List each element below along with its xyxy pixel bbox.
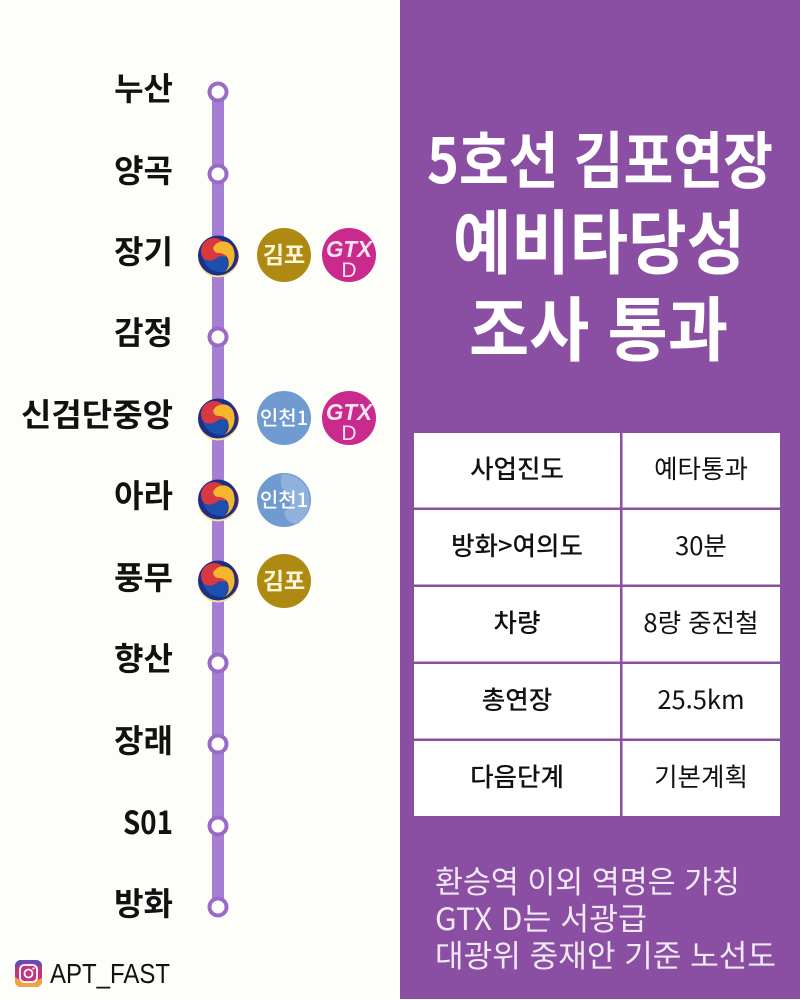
station: 장래: 장래 <box>114 716 173 762</box>
badge: 인천1 at 신검단중앙: 인천1 <box>260 402 308 431</box>
station names <box>21 64 173 925</box>
icon: emblem at 장기 <box>198 236 239 278</box>
badge: 인천1 at 아라: 인천1 <box>260 484 308 513</box>
station: 누산: 누산 <box>114 64 173 110</box>
station: 아라: 아라 <box>114 471 173 517</box>
badge: 인천1 at 아라 <box>257 473 311 527</box>
handle text: APT_FAST <box>50 958 170 989</box>
station: S01: S01 <box>123 798 173 844</box>
station: 장기: 장기 <box>114 227 173 273</box>
instagram credit <box>15 958 170 989</box>
row: 사업진도 <box>470 449 748 486</box>
row: 방화>여의도 <box>451 526 727 563</box>
station: 풍무: 풍무 <box>114 553 173 599</box>
title: 예비타당성 <box>453 188 745 289</box>
icon: emblem at 아라 <box>198 480 239 522</box>
icon: emblem at 풍무 <box>198 560 239 602</box>
icon: instagram <box>15 960 42 987</box>
station: 신검단중앙: 신검단중앙 <box>21 390 173 436</box>
station marker: 양곡 <box>210 166 226 182</box>
row: 차량: 차량 <box>494 603 540 640</box>
row: 사업진도: 사업진도 <box>470 449 564 486</box>
subway line <box>210 84 226 916</box>
row: 다음단계: 기본계획 <box>654 757 748 794</box>
badge: 김포 at 장기 <box>257 228 311 282</box>
station: 감정: 감정 <box>114 308 173 354</box>
station: 방화: 방화 <box>114 879 173 925</box>
badge: 김포 at 풍무: 김포 <box>263 562 305 596</box>
station marker: 장래 <box>210 736 226 752</box>
station marker: 누산 <box>210 84 226 100</box>
row: 다음단계: 다음단계 <box>470 757 564 794</box>
badge: 김포 at 풍무 <box>257 554 311 608</box>
footnote: GTX D는 서광급 <box>435 894 647 939</box>
station: 향산: 향산 <box>114 634 173 680</box>
footnote: 환승역 이외 역명은 가칭 <box>435 857 740 902</box>
station marker: S01 <box>210 818 226 834</box>
station: 양곡: 양곡 <box>114 146 173 192</box>
title: 조사 통과 <box>469 275 728 376</box>
station marker: 감정 <box>210 328 226 346</box>
row: 총연장: 총연장 <box>482 680 552 717</box>
badge: 인천1 at 신검단중앙 <box>257 391 311 445</box>
row: 사업진도: 예타통과 <box>654 449 748 486</box>
badge: 김포 at 장기: 김포 <box>263 236 305 270</box>
title <box>427 111 773 376</box>
row: 차량 <box>494 603 759 640</box>
station marker: 향산 <box>210 654 226 672</box>
row: 방화>여의도: 30분 <box>675 526 727 563</box>
row: 차량: 8량 중전철 <box>643 603 759 640</box>
badge: GTX D at 장기 <box>322 228 376 282</box>
icon: emblem at 신검단중앙 <box>198 398 239 440</box>
row: 총연장 <box>482 680 745 717</box>
row: 방화>여의도: 방화>여의도 <box>451 526 583 563</box>
panel: purple info panel <box>400 0 800 999</box>
row: 다음단계 <box>470 757 748 794</box>
station marker: 방화 <box>210 898 226 916</box>
table: project summary <box>414 433 780 816</box>
badge: GTX D at 신검단중앙 <box>322 391 376 445</box>
footnote <box>435 857 776 976</box>
row: 총연장: 25.5km <box>657 680 745 717</box>
footnote: 대광위 중재안 기준 노선도 <box>435 931 776 976</box>
